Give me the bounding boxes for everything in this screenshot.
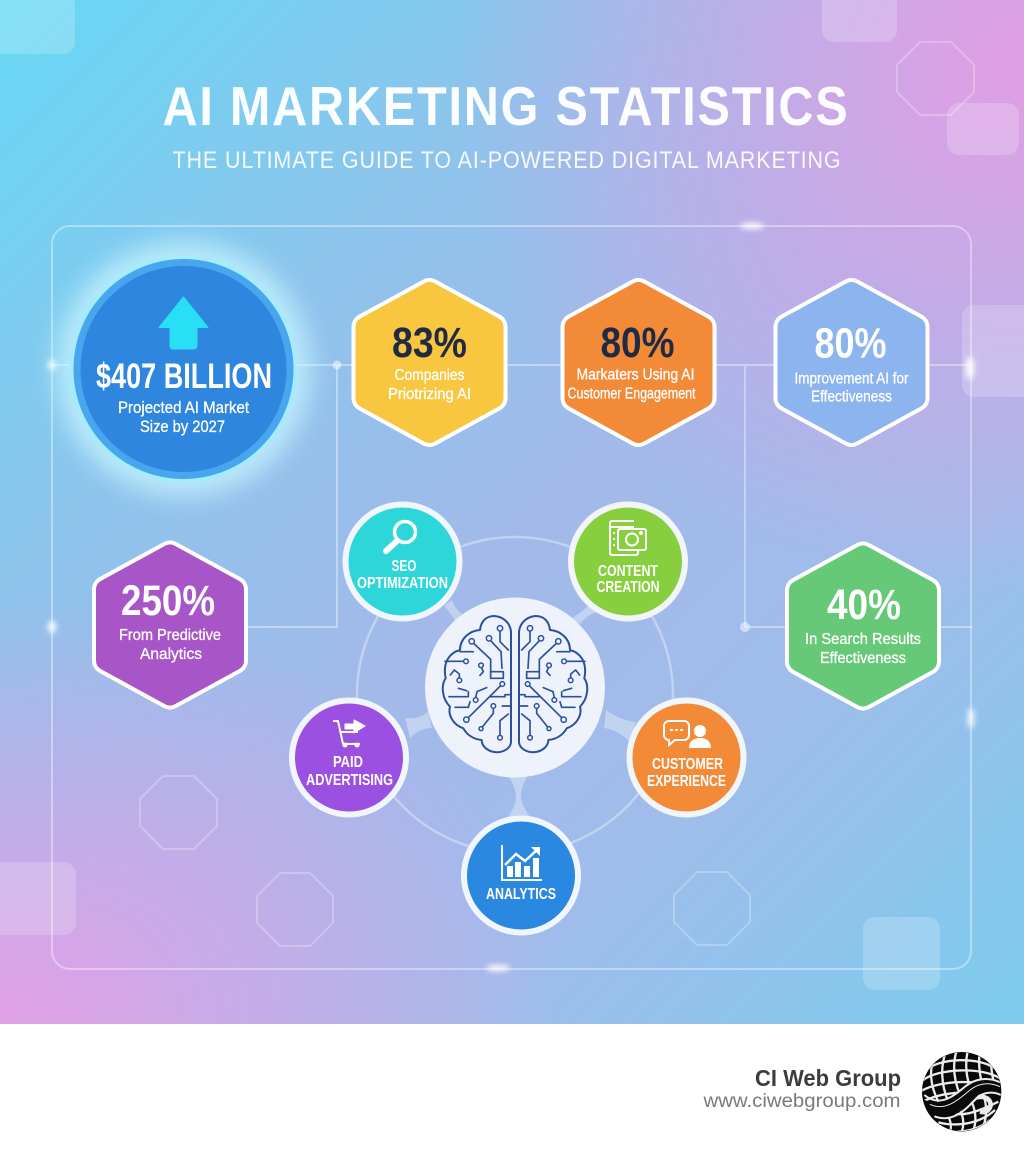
stat circle: $407 billion: $407 BILLION [96, 357, 272, 396]
brain hub [425, 598, 605, 778]
service: customer experience: EXPERIENCE [647, 773, 726, 790]
stat circle: $407 billion [56, 241, 312, 497]
subtitle: THE ULTIMATE GUIDE TO AI-POWERED DIGITAL MARKETING [172, 147, 842, 174]
service: paid advertising: PAID [333, 754, 363, 771]
footer band [704, 1052, 1002, 1132]
logo: globe [922, 1052, 1002, 1132]
icon: photo and document [610, 521, 646, 555]
website: www.ciwebgroup.com [702, 1091, 900, 1112]
service: content creation: CONTENT [598, 563, 658, 580]
hub ring and connectors [357, 537, 673, 853]
stat hexagon: 80% marketers [568, 292, 702, 433]
service: customer experience: CUSTOMER [652, 756, 723, 773]
stat hexagon: 80% marketers: 80% [600, 319, 674, 367]
title: AI MARKETING STATISTICS [162, 75, 850, 137]
stat hexagon: 83%: Companies [394, 367, 464, 384]
service: content creation [571, 504, 685, 618]
stat hexagon: 40% [799, 556, 927, 696]
icon: rising bar chart [502, 845, 542, 880]
stat hexagon: 83%: Priotrizing AI [388, 386, 471, 403]
stat hexagon: 83% [366, 292, 494, 433]
service: analytics: ANALYTICS [486, 886, 556, 903]
stat hexagon: 83%: 83% [392, 319, 467, 367]
service: SEO optimization: SEO [392, 558, 416, 575]
stat hexagon: 80% marketers: Customer Engagement [568, 386, 696, 402]
stat hexagon: 80% marketers: Markaters Using AI [576, 366, 694, 384]
icon: magnifier [386, 522, 416, 551]
service: SEO optimization [346, 504, 460, 618]
stat circle: $407 billion: Size by 2027 [140, 417, 225, 436]
service: analytics [464, 818, 578, 932]
stat hexagon: 40%: In Search Results [805, 631, 921, 648]
stat hexagon: 250%: From Predictive [119, 627, 221, 644]
service: paid advertising: ADVERTISING [306, 772, 393, 789]
icon: up arrow [159, 297, 208, 349]
stat hexagon: 80% improvement: Effectiveness [811, 388, 892, 406]
stat hexagon: 80% improvement [788, 292, 916, 433]
stat hexagon: 40%: 40% [827, 581, 901, 629]
stat hexagon: 250% [106, 554, 234, 696]
stat circle: $407 billion: Projected AI Market [118, 398, 249, 417]
service: content creation: CREATION [596, 579, 660, 596]
stat hexagon: 250%: Analytics [140, 646, 202, 663]
brand name: CI Web Group [755, 1065, 901, 1091]
service: customer experience [630, 700, 744, 814]
service: paid advertising [292, 700, 406, 814]
stat hexagon: 80% improvement: 80% [814, 320, 886, 368]
service: SEO optimization: OPTIMIZATION [357, 575, 448, 592]
stat hexagon: 250%: 250% [121, 577, 215, 625]
icon: cart with arrow [333, 720, 365, 748]
stat hexagon: 80% improvement: Improvement AI for [794, 370, 909, 388]
icon: chat bubble and person [664, 721, 711, 748]
stat hexagon: 40%: Effectiveness [820, 650, 906, 667]
icon: circuit brain [443, 616, 587, 752]
